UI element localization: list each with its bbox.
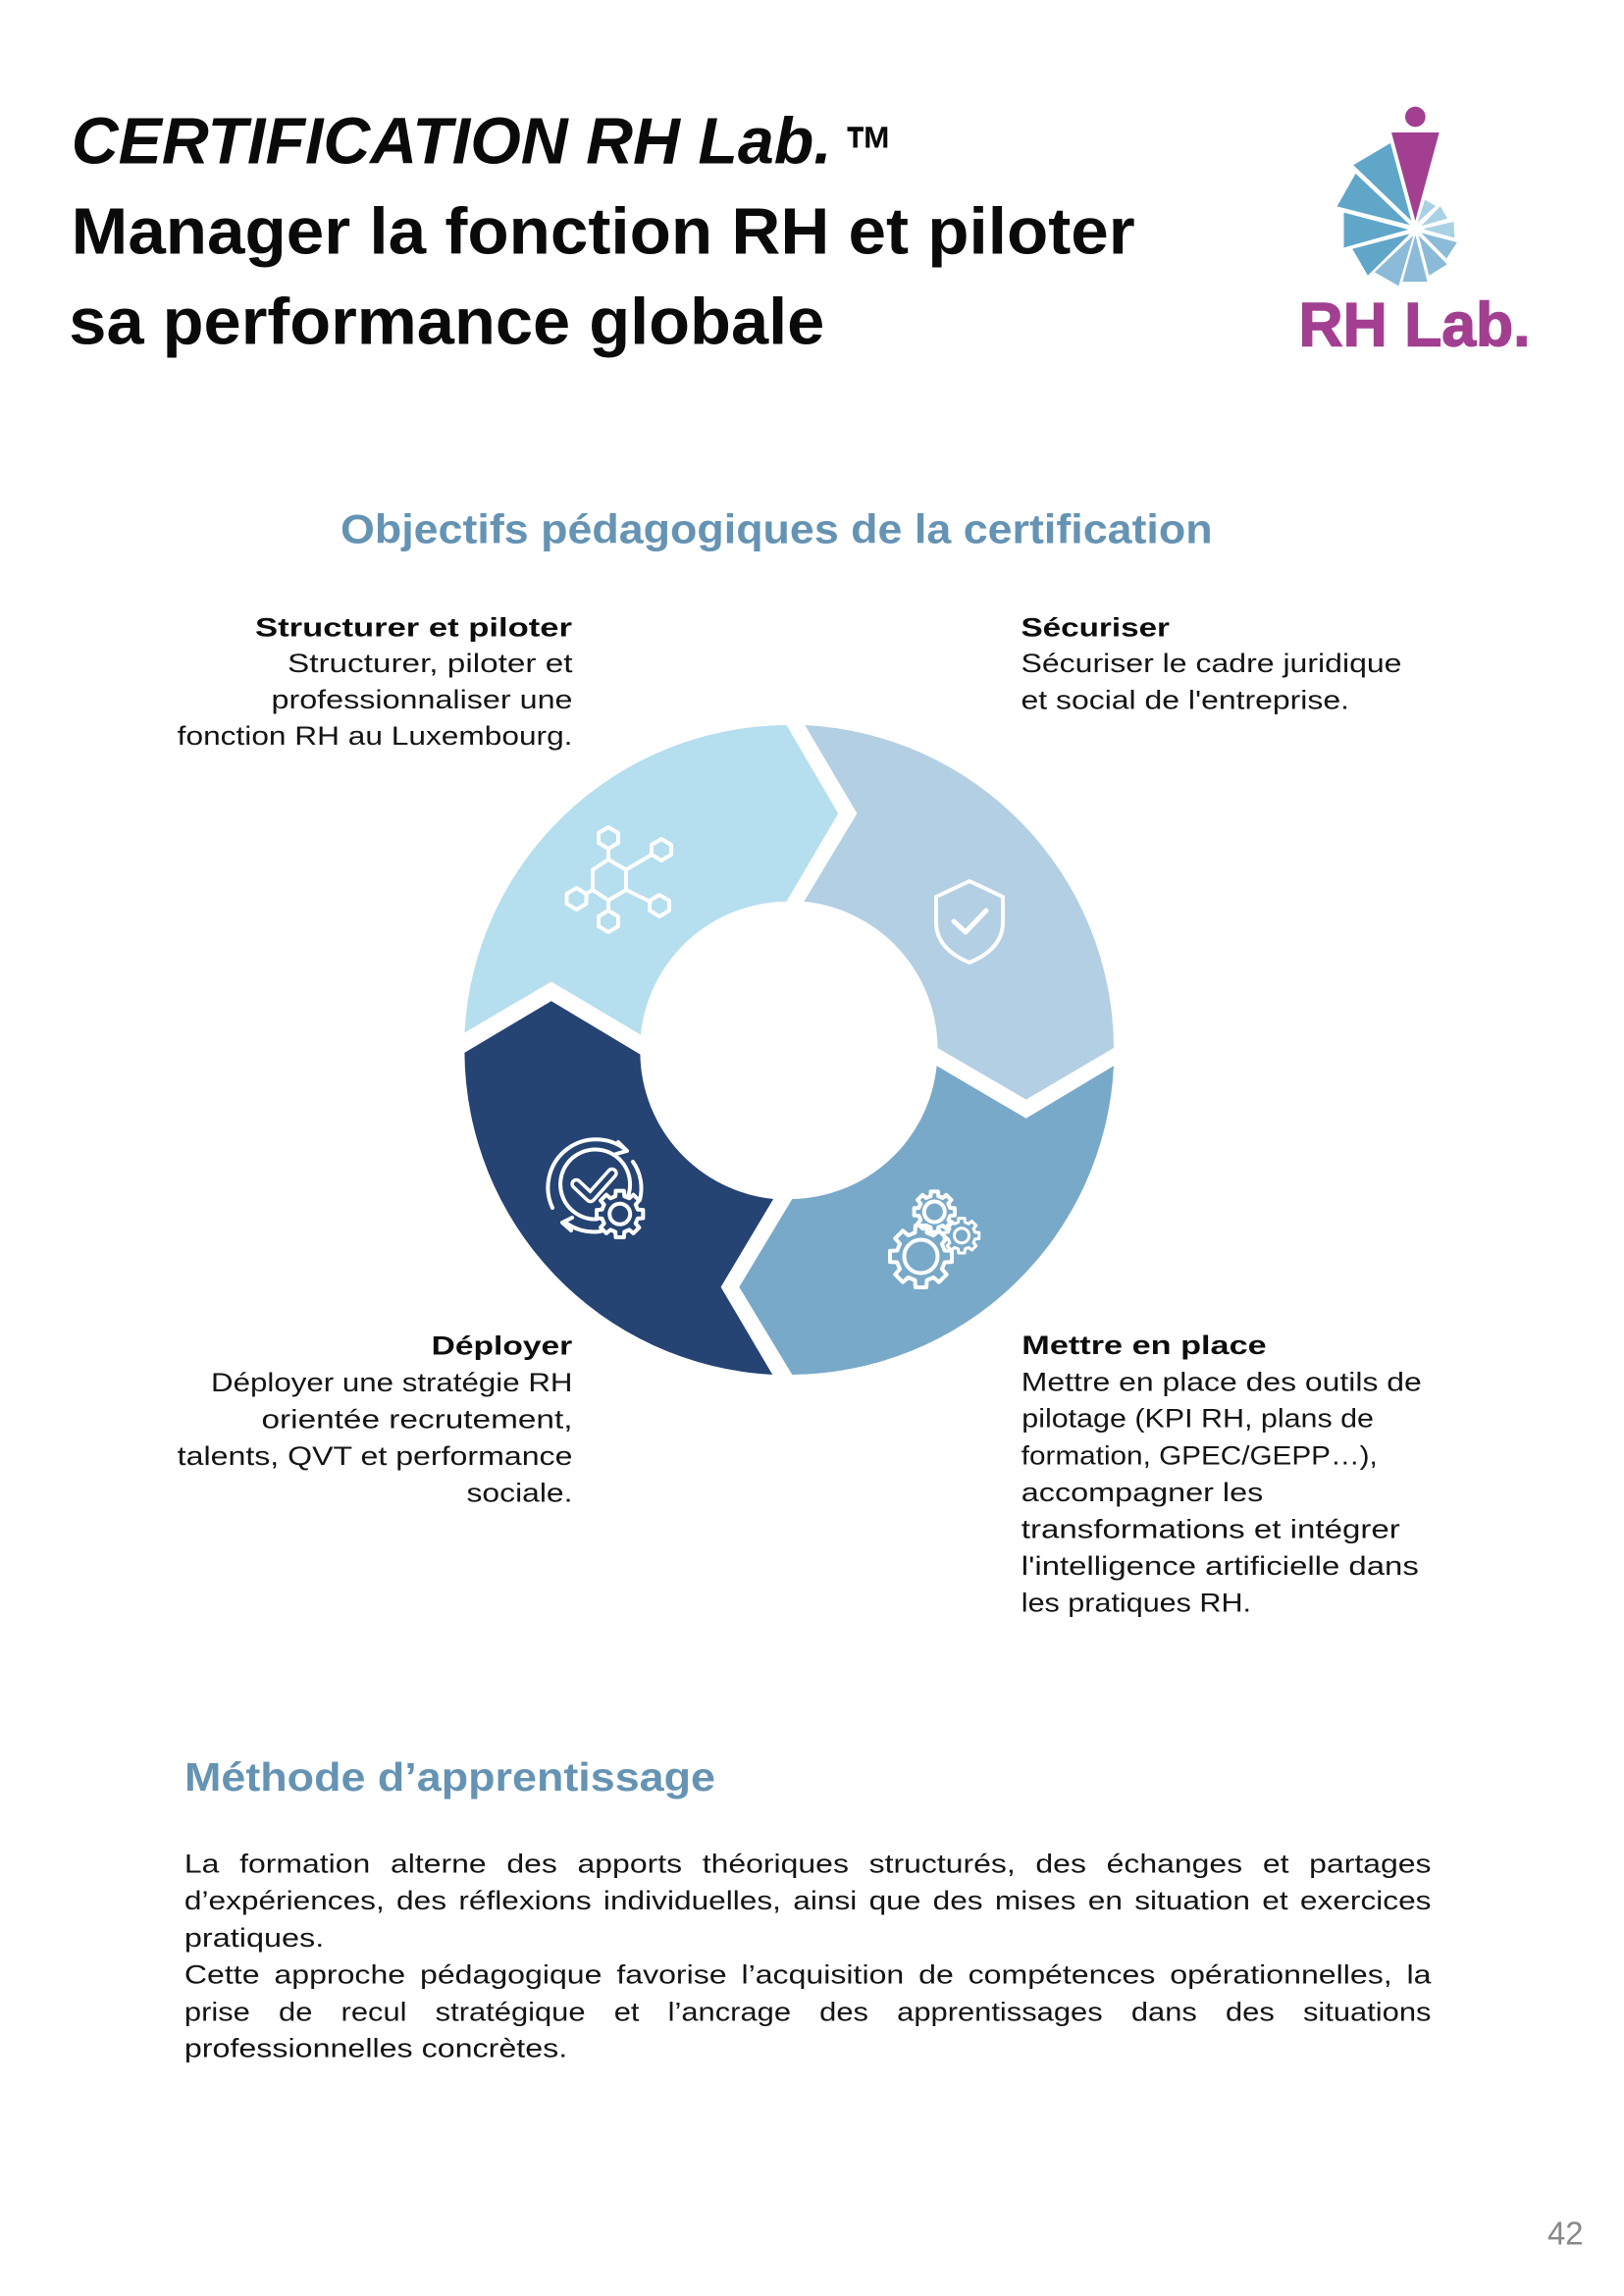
text block: méthode description [184, 1849, 1433, 2063]
heading: objectifs: Objectifs pédagogiques de la certification [341, 505, 1213, 551]
text block: mettre en place: transformations et intégrer [1022, 1514, 1400, 1543]
text block: déployer: Déployer une stratégie RH [211, 1368, 573, 1397]
page number: 42 [1547, 2215, 1584, 2251]
text block: mettre en place: formation, GPEC/GEPP…), [1022, 1441, 1378, 1471]
text block: méthode description: pratiques. [184, 1923, 324, 1953]
logo: RH Lab.: RH Lab. [1299, 291, 1531, 360]
text block: méthode description: d’expériences, des réflexions individuelles, ainsi que des mises en situation et exercices [184, 1886, 1431, 1915]
text block: déployer [178, 1331, 573, 1507]
text block: méthode description: La formation alterne des apports théoriques structurés, des échanges et partages [184, 1849, 1431, 1878]
text block: sécuriser: Sécuriser [1021, 612, 1171, 642]
text block: déployer: orientée recrutement, [261, 1405, 573, 1435]
text block: méthode description: professionnelles concrètes. [184, 2034, 567, 2063]
icon: cycle with check and gear [548, 1139, 643, 1237]
icon: shield with check [936, 881, 1003, 963]
segment: structurer [464, 725, 838, 1034]
text block: structurer et piloter: Structurer, piloter et [288, 649, 573, 678]
text block: déployer: Déployer [432, 1331, 573, 1360]
text block: mettre en place: Mettre en place des outils de [1022, 1368, 1422, 1397]
text block: déployer: sociale. [467, 1478, 573, 1507]
text block: sécuriser: Sécuriser le cadre juridique [1021, 649, 1401, 678]
title [69, 105, 1135, 359]
segment: déployer [464, 1001, 773, 1375]
text block: structurer et piloter [178, 612, 573, 751]
icon: molecule network [567, 827, 671, 932]
icon: gears [890, 1191, 979, 1287]
segment: mettre en place [739, 1066, 1114, 1375]
text block: mettre en place [1022, 1331, 1422, 1618]
title: sa performance globale [69, 286, 824, 359]
text block: mettre en place: l'intelligence artificielle dans [1022, 1551, 1419, 1581]
text block: méthode description: prise de recul stratégique et l’ancrage des apprentissages dans des situations [184, 1997, 1431, 2026]
cycle diagram [464, 725, 1114, 1375]
title: CERTIFICATION RH Lab. [72, 105, 832, 179]
text block: mettre en place: pilotage (KPI RH, plans de [1022, 1403, 1374, 1433]
text block: mettre en place: accompagner les [1022, 1478, 1263, 1507]
text block: méthode description: Cette approche pédagogique favorise l’acquisition de compétences opérationnelles, la [184, 1960, 1433, 1990]
text block: structurer et piloter: Structurer et piloter [255, 612, 573, 642]
text block: structurer et piloter: professionnaliser une [271, 685, 573, 714]
text block: structurer et piloter: fonction RH au Luxembourg. [178, 721, 572, 751]
text block: sécuriser [1021, 612, 1401, 715]
heading: méthode d'apprentissage: Méthode d’apprentissage [184, 1754, 715, 1800]
title: ™ [843, 113, 892, 187]
logo: RH Lab. [1299, 107, 1531, 360]
title: Manager la fonction RH et piloter [72, 194, 1135, 268]
text block: mettre en place: les pratiques RH. [1022, 1589, 1251, 1618]
text block: déployer: talents, QVT et performance [178, 1441, 572, 1471]
text block: mettre en place: Mettre en place [1022, 1331, 1267, 1360]
text block: sécuriser: et social de l'entreprise. [1021, 686, 1349, 715]
segment: sécuriser [804, 725, 1114, 1100]
